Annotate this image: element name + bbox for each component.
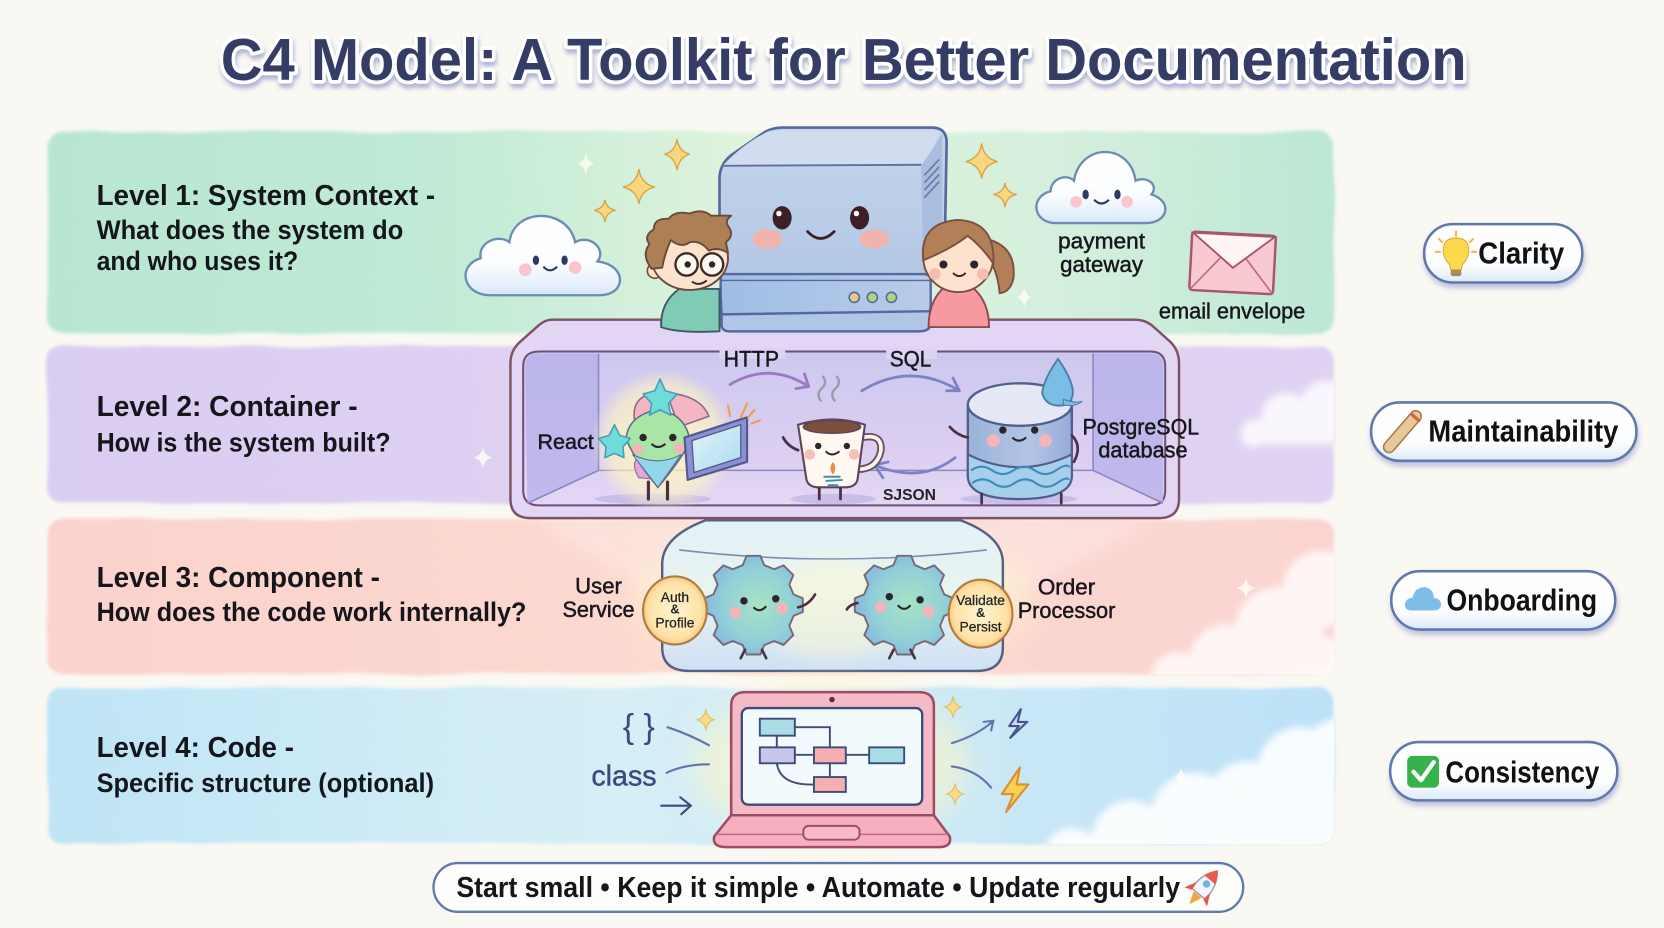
decorative clouds in level 2 band [1238, 378, 1334, 449]
title: C4 Model: A Toolkit for Better Documentation [221, 26, 1467, 93]
badge: Auth and Profile: & [670, 602, 680, 617]
icon: rocket [1178, 861, 1229, 914]
decorative clouds in level 4 band [1044, 716, 1334, 844]
component box [631, 520, 1035, 674]
icon: email envelope [1189, 232, 1276, 294]
label: React: React [538, 431, 594, 454]
level 2 text: How is the system built? [97, 427, 391, 457]
tagline pill: Start small • Keep it simple • Automate • Update regularly [456, 872, 1180, 904]
girl character [923, 220, 1014, 327]
label: PostgreSQL database: PostgreSQL [1082, 414, 1199, 439]
laptop [694, 685, 970, 847]
level 4 text: Specific structure (optional) [97, 768, 434, 798]
icon: gold bolt [1002, 768, 1028, 812]
label: curly braces: { } [623, 708, 655, 746]
label: Order Processor: Processor [1018, 598, 1116, 623]
level 1 text: and who uses it? [97, 246, 298, 276]
pill: Onboarding: Onboarding [1446, 582, 1597, 617]
badge: Auth and Profile: Auth [661, 590, 689, 605]
label: PostgreSQL database: database [1098, 438, 1188, 463]
level 1 text: What does the system do [97, 215, 403, 245]
level 3 text: Level 3: Component - [97, 562, 380, 594]
arrow: SQL [862, 376, 959, 391]
pill: Onboarding [1391, 571, 1615, 630]
panel: level 3 band [48, 519, 1334, 674]
label: SQL: SQL [890, 346, 931, 371]
coffee mug character [783, 376, 881, 499]
badge: Validate and Persist: & [976, 605, 985, 620]
panel: level 2 band [48, 346, 1334, 503]
label: User Service [562, 573, 635, 622]
badge: Auth and Profile [643, 576, 707, 644]
icon: small sparkles [697, 696, 964, 805]
tagline pill [434, 861, 1243, 914]
badge: Validate and Persist: Validate [956, 593, 1005, 608]
pill: Maintainability [1371, 402, 1636, 461]
icon: gold sparkles [577, 139, 1017, 222]
level 4 text: Level 4: Code - [97, 732, 294, 764]
label: payment gateway [1058, 229, 1146, 277]
flow diagram on screen [760, 719, 904, 792]
decorative white sparkles [473, 287, 1255, 788]
icon: scroll [1389, 414, 1420, 447]
server character [720, 128, 947, 331]
decorative clouds in level 3 band [1149, 548, 1334, 674]
container box [510, 320, 1199, 518]
arrows around laptop [661, 721, 993, 814]
pill: Consistency: Consistency [1445, 754, 1599, 789]
level 3 text [97, 562, 526, 627]
icon: light bulb [1436, 232, 1476, 276]
arrow: HTTP [730, 373, 809, 389]
level 3 text: How does the code work internally? [97, 597, 526, 627]
pill: Maintainability: Maintainability [1428, 414, 1618, 449]
label: garbled return label: SJSON [883, 487, 936, 504]
boy character [646, 211, 731, 332]
label: Order Processor: Order [1038, 575, 1096, 600]
label: User Service: Service [562, 597, 635, 622]
level 1 text [97, 180, 435, 276]
pill: Clarity: Clarity [1478, 235, 1564, 270]
icon: green check [1407, 756, 1439, 788]
label: email envelope: email envelope [1159, 299, 1305, 324]
icon: outlined bolt [1009, 709, 1027, 738]
label: User Service: User [575, 573, 622, 598]
pill: Clarity [1424, 224, 1582, 283]
badge: Validate and Persist [949, 580, 1012, 648]
label: payment gateway: gateway [1060, 252, 1144, 277]
label: HTTP: HTTP [724, 346, 779, 371]
label: payment gateway: payment [1058, 229, 1146, 254]
badge: Auth and Profile: Profile [655, 615, 695, 630]
icon: blue cloud [1405, 587, 1441, 610]
panel: level 1 band [48, 132, 1334, 333]
gear character: Order Processor [847, 556, 954, 658]
light beams between container and component [531, 519, 1157, 610]
label: Order Processor [1018, 575, 1116, 623]
pill: Consistency [1390, 742, 1617, 800]
icon: smiling cloud left [466, 216, 620, 295]
panel: level 4 band [48, 688, 1334, 844]
React character [591, 368, 760, 513]
label: class: class [591, 761, 657, 793]
database cylinder character [950, 359, 1082, 503]
level 1 text: Level 1: System Context - [97, 180, 435, 212]
icon: smiling cloud right [1036, 152, 1165, 223]
level 4 text [97, 732, 434, 798]
arrow: return [874, 458, 955, 478]
badge: Validate and Persist: Persist [960, 620, 1002, 635]
level 2 text: Level 2: Container - [97, 391, 358, 423]
gear character: User Service [704, 556, 815, 658]
label: PostgreSQL database [1082, 414, 1199, 463]
level 2 text [97, 391, 391, 457]
